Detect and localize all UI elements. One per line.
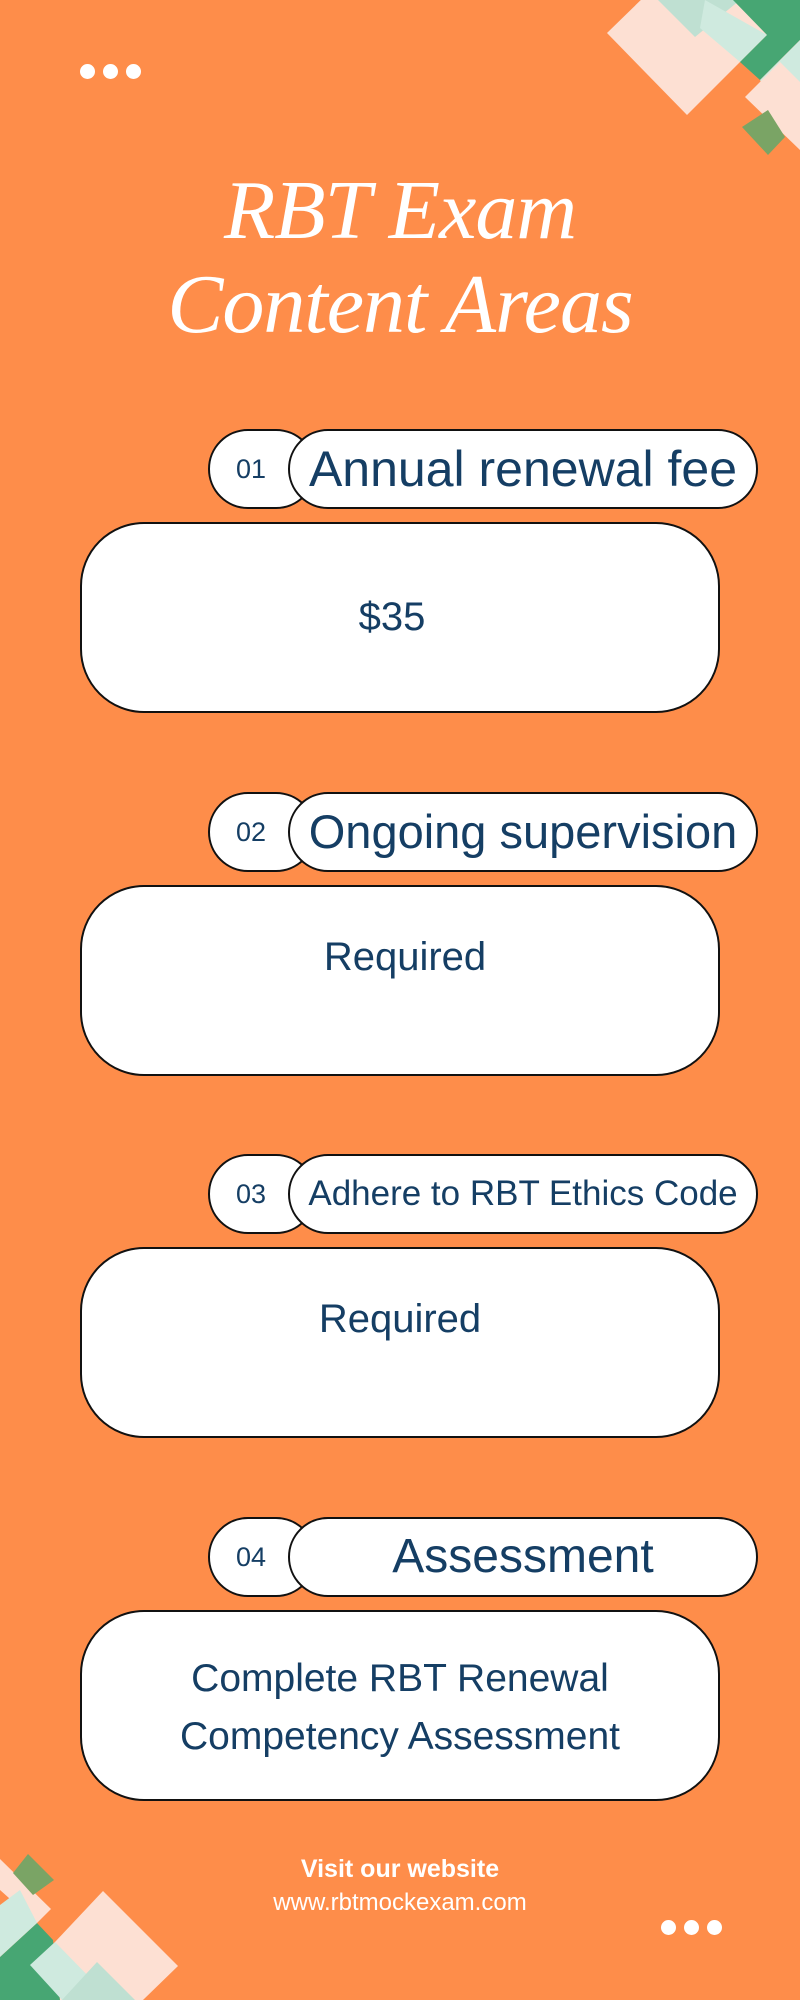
footer text xyxy=(273,1855,527,1916)
box: $35: $35 xyxy=(359,595,425,639)
section 03 xyxy=(80,1154,758,1438)
number 03 xyxy=(208,1154,316,1234)
heading: ongoing supervision xyxy=(288,792,758,872)
title xyxy=(167,164,633,351)
footer text: www.rbtmockexam.com xyxy=(273,1889,527,1916)
section 01 xyxy=(80,429,758,713)
box: required xyxy=(80,885,720,1076)
number 04: 04 xyxy=(236,1542,266,1572)
dots bottom-right xyxy=(661,1920,722,1935)
number 03: 03 xyxy=(236,1179,266,1209)
box: competency assessment xyxy=(80,1610,720,1801)
number 04 xyxy=(208,1517,316,1597)
box: required: Required xyxy=(324,935,486,979)
dots top-left xyxy=(80,64,141,79)
heading: ongoing supervision: Ongoing supervision xyxy=(309,805,737,858)
title: Content Areas xyxy=(167,258,633,351)
heading: assessment: Assessment xyxy=(392,1530,654,1583)
box: competency assessment: Complete RBT Renewal xyxy=(191,1657,609,1700)
heading: annual renewal fee: Annual renewal fee xyxy=(309,441,737,497)
box: $35 xyxy=(80,522,720,713)
section 02 xyxy=(80,792,758,1076)
footer text: Visit our website xyxy=(301,1855,499,1883)
title: RBT Exam xyxy=(224,164,576,257)
box: competency assessment: Competency Assessment xyxy=(180,1715,620,1758)
heading: adhere to ethics code xyxy=(288,1154,758,1234)
heading: annual renewal fee xyxy=(288,429,758,509)
number 02: 02 xyxy=(236,817,266,847)
number 01: 01 xyxy=(236,454,266,484)
section 04 xyxy=(80,1517,758,1801)
heading: assessment xyxy=(288,1517,758,1597)
heading: adhere to ethics code: Adhere to RBT Ethics Code xyxy=(308,1174,738,1213)
number 01 xyxy=(208,429,316,509)
box: required xyxy=(80,1247,720,1438)
box: required: Required xyxy=(319,1297,481,1341)
number 02 xyxy=(208,792,316,872)
